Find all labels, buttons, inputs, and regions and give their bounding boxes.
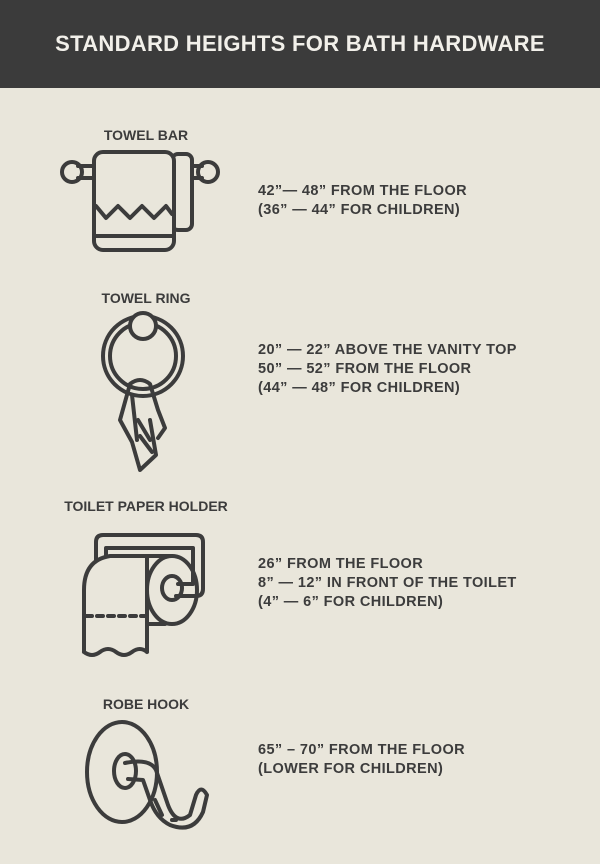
text: toilet paper holder: 26” FROM THE FLOOR — [258, 556, 423, 572]
text: towel bar — [258, 183, 467, 218]
label: toilet paper holder: TOILET PAPER HOLDER — [64, 498, 228, 514]
text: towel ring — [258, 342, 517, 396]
text: towel ring: (44” — 48” FOR CHILDREN) — [258, 380, 460, 396]
text: towel ring: 20” — 22” ABOVE THE VANITY TOP — [258, 342, 517, 358]
title — [0, 0, 600, 88]
text: towel ring: 50” — 52” FROM THE FLOOR — [258, 361, 471, 377]
icon: towel bar — [62, 152, 218, 250]
text: robe hook: 65” – 70” FROM THE FLOOR — [258, 742, 465, 758]
icon: robe hook — [87, 722, 207, 828]
title: STANDARD HEIGHTS FOR BATH HARDWARE — [55, 31, 545, 56]
label: robe hook: ROBE HOOK — [103, 696, 189, 712]
text: robe hook — [258, 742, 465, 777]
text: toilet paper holder: 8” — 12” IN FRONT OF THE TOILET — [258, 575, 517, 591]
text: toilet paper holder: (4” — 6” FOR CHILDREN) — [258, 594, 443, 610]
icon: towel ring — [103, 313, 183, 470]
text: towel bar: (36” — 44” FOR CHILDREN) — [258, 202, 460, 218]
label: towel bar: TOWEL BAR — [104, 127, 188, 143]
text: towel bar: 42”— 48” FROM THE FLOOR — [258, 183, 467, 199]
label: towel ring: TOWEL RING — [102, 290, 190, 306]
text: robe hook: (LOWER FOR CHILDREN) — [258, 761, 443, 777]
text: toilet paper holder — [258, 556, 517, 610]
icon: toilet paper holder — [84, 535, 203, 655]
